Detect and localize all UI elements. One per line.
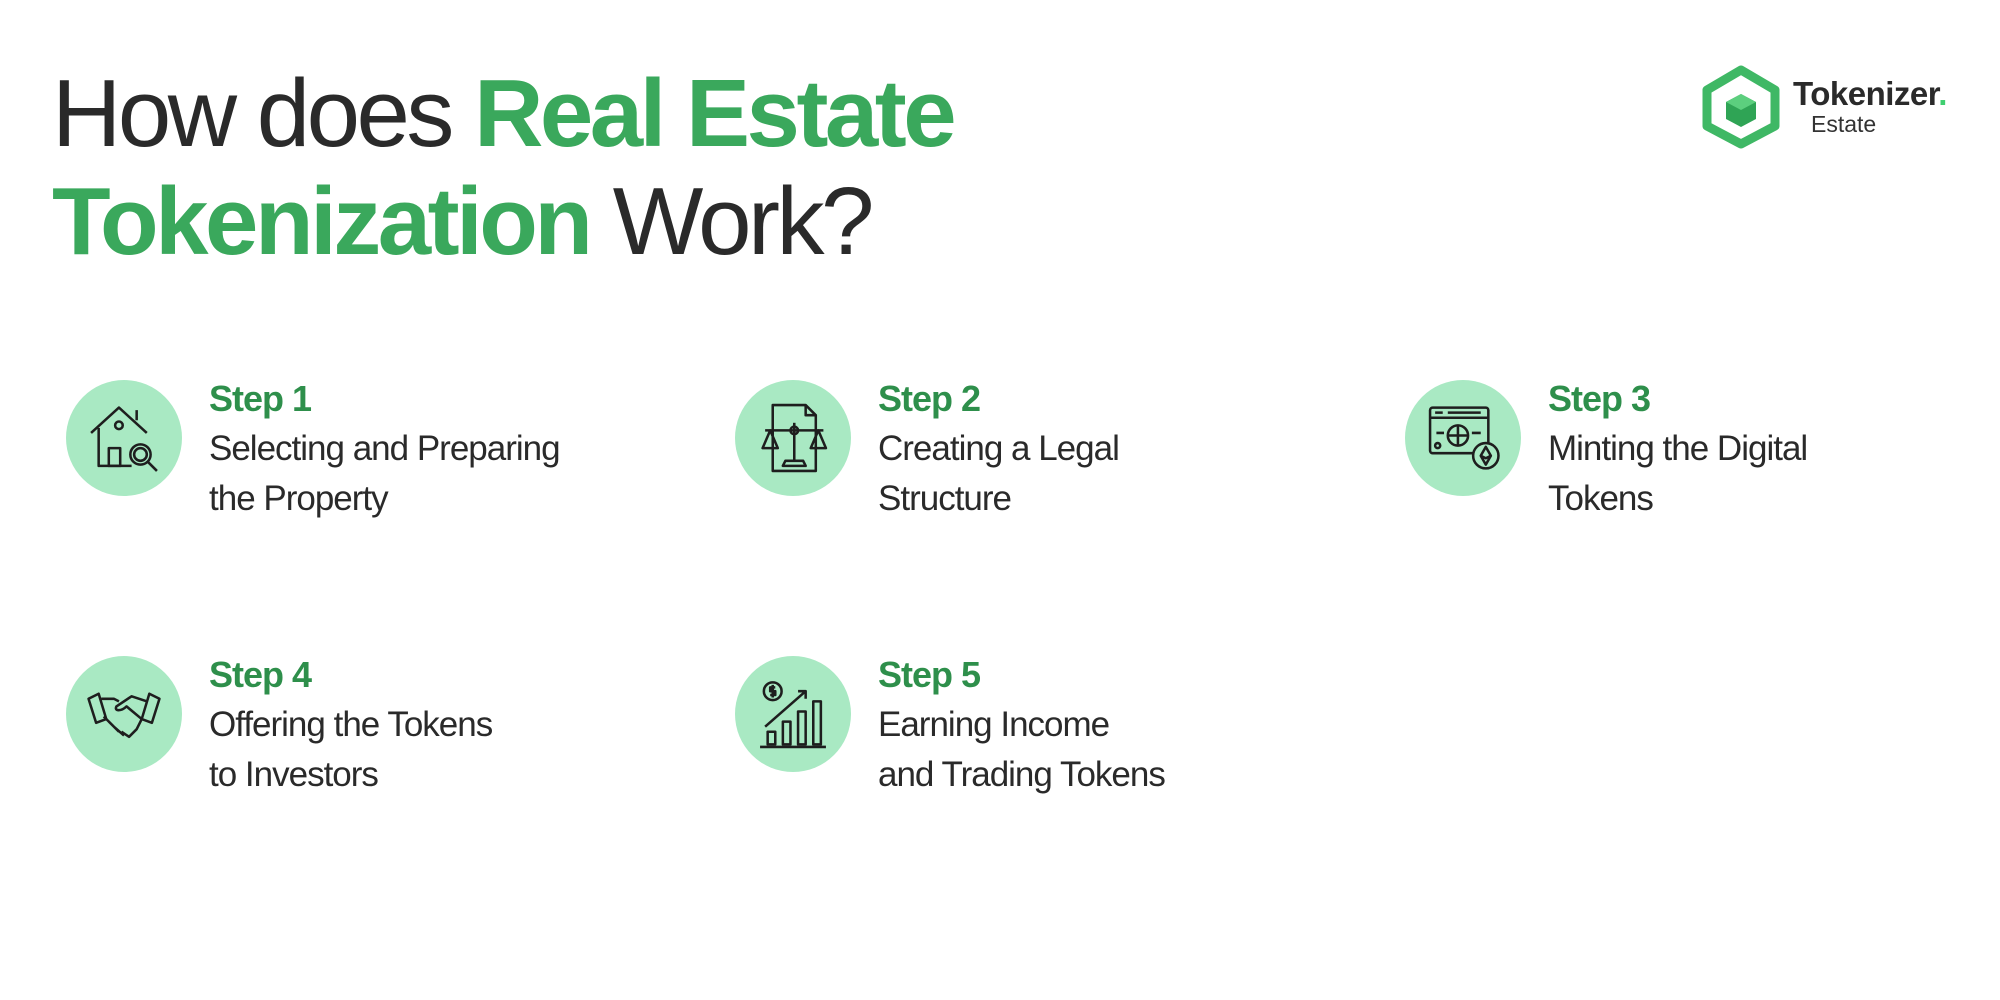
step 5 xyxy=(735,654,1165,794)
logo text: Tokenizer. xyxy=(1793,75,1947,112)
logo icon xyxy=(1702,66,1780,148)
step 1 text: Selecting and Preparing xyxy=(209,429,560,468)
step 5 text xyxy=(878,654,1165,794)
title xyxy=(52,60,954,275)
title: How does Real Estate xyxy=(52,60,953,167)
logo: Estate xyxy=(1811,111,1876,137)
step 1 text: Step 1 xyxy=(209,378,311,419)
step 2 text: Creating a Legal xyxy=(878,429,1119,468)
step 3 text: Step 3 xyxy=(1548,378,1650,419)
step 1 text xyxy=(209,378,560,518)
step 2 text: Step 2 xyxy=(878,378,980,419)
icon: income chart xyxy=(735,656,851,772)
step 3 text xyxy=(1548,378,1807,518)
step 5 text: Earning Income xyxy=(878,705,1109,744)
step 2 text: Structure xyxy=(878,479,1011,518)
step 1 xyxy=(66,378,560,518)
step 5 text: and Trading Tokens xyxy=(878,755,1165,794)
step 3 xyxy=(1405,378,1807,518)
icon: legal scales xyxy=(735,380,851,496)
step 3 text: Tokens xyxy=(1548,479,1653,518)
icon: handshake xyxy=(66,656,182,772)
icon: house search xyxy=(66,380,182,496)
step 4 xyxy=(66,654,492,794)
title: Tokenization Work? xyxy=(52,168,871,275)
icon: web token xyxy=(1405,380,1521,496)
step 2 text xyxy=(878,378,1119,518)
step 4 text: Step 4 xyxy=(209,654,311,695)
step 4 text: to Investors xyxy=(209,755,378,794)
step 4 text xyxy=(209,654,492,794)
step 2 xyxy=(735,378,1119,518)
step 5 text: Step 5 xyxy=(878,654,980,695)
logo xyxy=(1702,66,1947,148)
step 4 text: Offering the Tokens xyxy=(209,705,492,744)
step 1 text: the Property xyxy=(209,479,388,518)
step 3 text: Minting the Digital xyxy=(1548,429,1807,468)
